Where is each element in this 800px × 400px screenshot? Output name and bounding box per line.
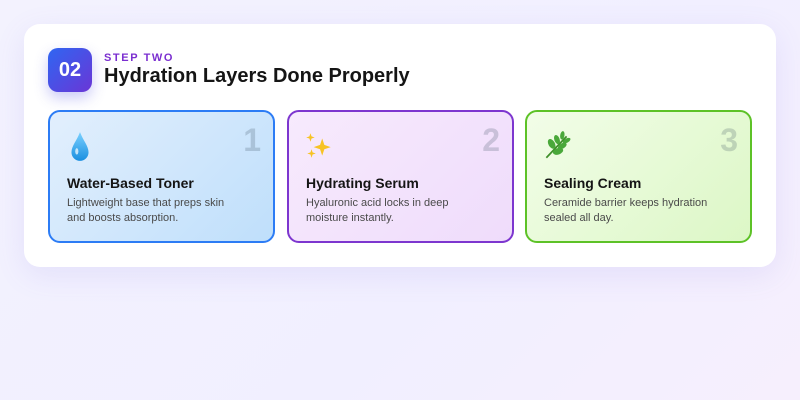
badge: step number: 02: [59, 59, 81, 81]
eyebrow: step two: STEP TWO: [104, 52, 174, 64]
number 1: 1: [243, 122, 261, 158]
number 2: 2: [482, 122, 500, 158]
card: hydrating serum: [287, 110, 514, 243]
number 3: 3: [720, 122, 738, 158]
card: sealing cream: [525, 110, 752, 243]
badge: step number: [48, 48, 92, 92]
description: Lightweight base that preps skin and boosts absorption.: [67, 197, 224, 224]
icon: water drop: [72, 132, 88, 161]
title: Hydration Layers Done Properly: [104, 65, 410, 87]
description: Ceramide barrier keeps hydration sealed all day.: [544, 197, 707, 224]
icon: sparkles: [306, 133, 331, 158]
description: Hyaluronic acid locks in deep moisture instantly.: [306, 197, 448, 224]
heading: Hydrating Serum: [306, 175, 419, 191]
heading: Water-Based Toner: [67, 175, 194, 191]
heading: Sealing Cream: [544, 175, 641, 191]
panel: main card: [24, 24, 776, 267]
icon: herb: [546, 131, 570, 158]
card: water-based toner: [48, 110, 275, 243]
